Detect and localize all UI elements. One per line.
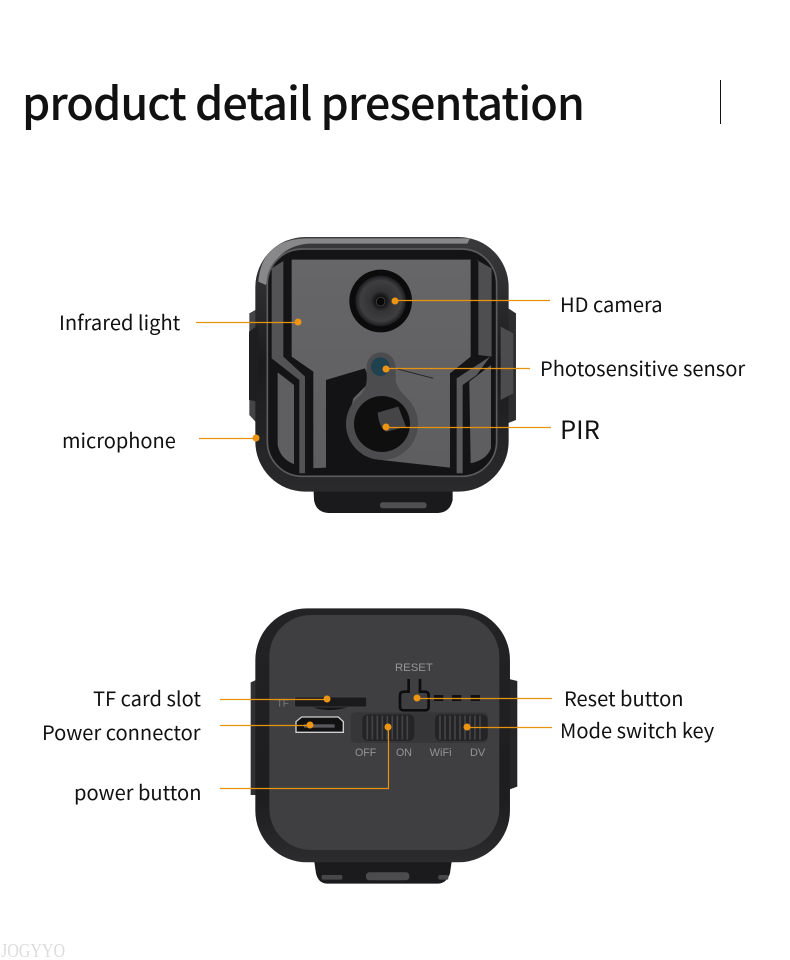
switch recess — [351, 712, 488, 743]
callout: TF card slot: TF card slot — [93, 683, 201, 712]
mode switch — [435, 714, 488, 741]
camera lens — [349, 270, 412, 332]
callout: PIR: PIR — [560, 410, 600, 447]
switch labels: ON — [396, 747, 412, 759]
outer shell — [255, 237, 509, 492]
callout: Infrared light: Infrared light — [59, 307, 181, 336]
callout: Photosensitive sensor — [382, 353, 745, 382]
callout: power button: power button — [74, 777, 201, 806]
callout: Power connector — [42, 717, 314, 746]
callout: HD camera: HD camera — [560, 289, 663, 318]
callout: Reset button: Reset button — [564, 683, 684, 712]
callout: Mode switch key — [464, 715, 715, 744]
photosensitive sensor — [371, 357, 390, 376]
callout: Photosensitive sensor: Photosensitive sensor — [540, 353, 745, 382]
title: product detail presentation — [22, 68, 585, 133]
callout: TF card slot — [93, 683, 330, 712]
callout: PIR — [382, 410, 600, 447]
callout: Reset button — [414, 683, 684, 712]
callout: Mode switch key: Mode switch key — [560, 715, 715, 744]
front face panel — [292, 260, 471, 468]
back panel — [269, 615, 499, 850]
callout: power button — [74, 724, 392, 806]
side buttons — [251, 678, 260, 795]
left side button — [249, 308, 258, 425]
switch labels: OFF — [355, 747, 377, 759]
callout: microphone: microphone — [62, 425, 176, 454]
outer shell — [255, 608, 510, 862]
front view camera — [249, 237, 516, 513]
bottom mount — [313, 485, 453, 513]
right side button base — [503, 305, 516, 425]
callout: Power connector: Power connector — [42, 717, 201, 746]
switch labels: WiFi — [430, 747, 452, 759]
callout: microphone — [62, 425, 260, 454]
cursor divider — [720, 80, 721, 124]
side button faces — [249, 325, 258, 402]
callout: HD camera — [392, 289, 663, 318]
bottom mount — [313, 855, 453, 884]
back view camera — [251, 608, 517, 884]
power connector — [296, 717, 343, 732]
left side strips — [272, 261, 305, 473]
callout: Infrared light — [59, 307, 302, 336]
PIR housing — [346, 352, 418, 460]
right side strips — [477, 260, 492, 357]
reset button — [400, 679, 429, 710]
TF card slot — [310, 707, 350, 710]
switch labels — [355, 662, 486, 759]
power switch — [362, 714, 414, 741]
back view camera: TF — [277, 698, 289, 709]
switch labels: RESET — [395, 662, 433, 674]
switch labels: DV — [470, 747, 486, 759]
